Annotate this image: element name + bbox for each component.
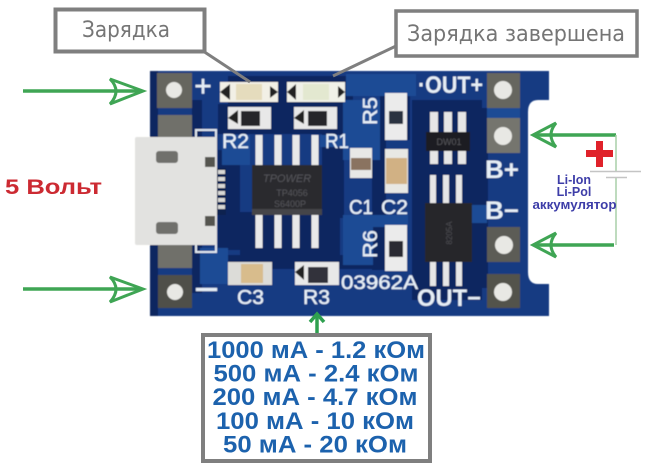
silk: C3: C3: [237, 287, 264, 309]
leader line: charge complete: [333, 46, 396, 76]
silk: R2: R2: [222, 131, 249, 153]
callout: charge complete: [333, 11, 637, 76]
LED: charging: [220, 82, 278, 102]
arrow: R3 to table: [310, 314, 324, 334]
protection MOSFET IC: 8205A: [445, 221, 454, 245]
resistor R1: [294, 107, 337, 129]
label box: charging: [56, 10, 204, 52]
silk: R1: R1: [325, 131, 349, 153]
pad: OUT minus: [487, 274, 520, 308]
charger IC TP4056: TPOWER: [263, 173, 311, 185]
row: 100 mA: 100 мА - 10 кОм: [216, 408, 414, 435]
icon: red plus: [586, 141, 613, 167]
battery line: accumulator: аккумулятор: [532, 198, 617, 212]
LED: charge complete: [287, 82, 345, 102]
pad: input upper hidden: [158, 115, 192, 139]
silk: R5: R5: [360, 97, 382, 125]
capacitor C1: [350, 148, 372, 178]
panel: PCB module: [135, 70, 549, 316]
resistor R6: [385, 225, 407, 271]
silk: R6: R6: [360, 230, 382, 258]
dark copper regions: [150, 71, 488, 316]
row: 1000 mA: 1000 мА - 1.2 кОм: [207, 337, 425, 364]
arrow: top input: [23, 79, 143, 104]
arrow: battery minus: [533, 233, 614, 257]
pad: input lower hidden: [158, 243, 192, 268]
callout: charging: [56, 10, 250, 82]
silk: R3: R3: [303, 287, 330, 309]
label: 5 volts: 5 Вольт: [5, 176, 102, 199]
PCB board: [150, 71, 549, 316]
battery symbol: [590, 135, 641, 245]
table frame: [203, 335, 430, 461]
silk: minus: [196, 288, 217, 291]
pad: input minus: [158, 275, 192, 308]
capacitor C3: [228, 262, 272, 285]
micro USB connector: [135, 130, 226, 252]
silk: B minus: B−: [485, 197, 519, 225]
table rows: [207, 337, 425, 458]
silk: board code: 03962A: [341, 273, 418, 294]
resistor R3: [295, 262, 339, 285]
protection MOSFET IC: [425, 175, 472, 286]
transistor SOT: DW01: [436, 137, 462, 147]
capacitor C2: [385, 149, 408, 193]
leader line: charging: [203, 51, 250, 82]
label text: charging: Зарядка: [82, 18, 170, 43]
pad: B minus: [487, 227, 520, 262]
silk: OUT plus: ·OUT+: [418, 72, 483, 99]
pad: OUT plus: [487, 73, 520, 108]
label: battery type: [532, 173, 617, 212]
resistor R5: [385, 93, 407, 140]
resistor R2: [228, 107, 271, 129]
row: 200 mA: 200 мА - 4.7 кОм: [212, 384, 418, 411]
battery line: Li-Ion: Li-Ion: [557, 173, 591, 187]
battery line: Li-Pol: Li-Pol: [557, 185, 591, 199]
transistor SOT: [426, 112, 470, 164]
label text: charge complete: Зарядка завершена: [407, 22, 625, 47]
pad: B plus: [487, 118, 520, 153]
silkscreen labels: [194, 70, 519, 312]
silk: OUT minus: OUT−: [417, 285, 481, 312]
pad: input plus: [157, 73, 192, 108]
table: charge current vs resistor: [203, 335, 430, 461]
silk: C2: C2: [381, 197, 408, 219]
label box: charge complete: [396, 11, 637, 56]
silk: C1: C1: [349, 197, 373, 219]
row: 500 mA: 500 мА - 2.4 кОм: [214, 360, 418, 388]
charger IC TP4056: TP4056: [276, 188, 308, 198]
row: 50 mA: 50 мА - 20 кОм: [223, 432, 407, 458]
arrow: battery plus: [533, 123, 616, 147]
charger IC TP4056: S6400P: [274, 199, 306, 209]
arrow: bottom input: [23, 277, 143, 302]
charger IC TP4056: [252, 135, 322, 248]
silk: B plus: B+: [485, 156, 519, 184]
silk: plus: +: [194, 70, 212, 103]
